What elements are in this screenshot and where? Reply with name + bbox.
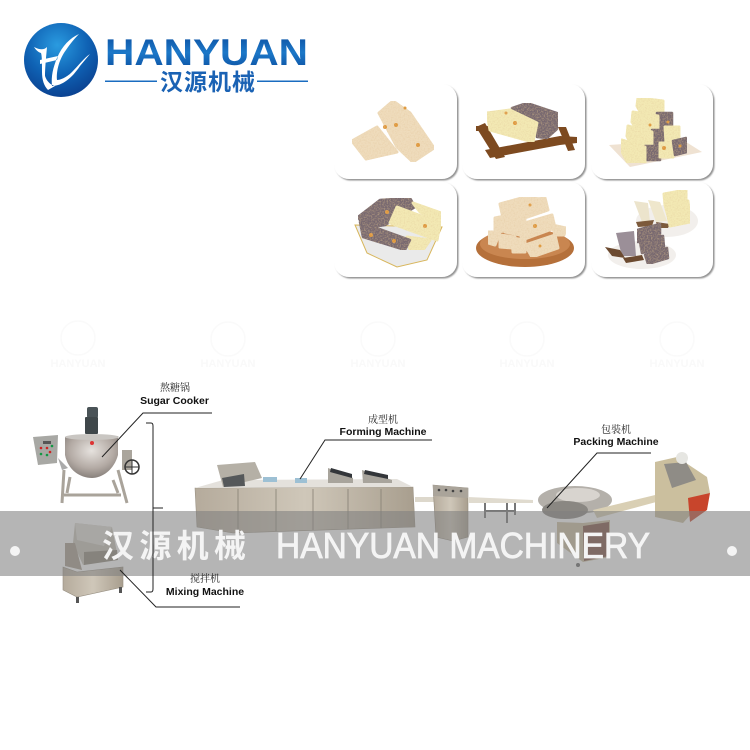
callout: Mixing Machine: 搅拌机	[190, 572, 220, 585]
watermark grid: HANYUAN	[350, 358, 406, 370]
side gearbox and hand wheel	[122, 450, 132, 470]
logo wordmark: HANYUAN	[105, 32, 308, 73]
watermark grid: HANYUAN	[200, 358, 256, 370]
logo: Hanyuan	[24, 23, 308, 97]
panel: product photo 4	[334, 182, 457, 277]
callout: Packing Machine: 包裝机	[601, 423, 631, 436]
panel: product photo 6	[591, 182, 713, 277]
machine: mixing machine	[63, 523, 123, 603]
logo Chinese name: 汉源机械	[160, 69, 255, 95]
depositor head	[217, 462, 262, 487]
machine: forming machine	[195, 462, 415, 533]
watermark grid: HANYUAN	[500, 358, 555, 370]
wrapper head	[655, 457, 710, 523]
callout: Mixing Machine: Mixing Machine	[166, 586, 244, 598]
callout: Sugar Cooker: Sugar Cooker	[140, 395, 209, 407]
banner English title: HANYUAN MACHINERY	[276, 525, 650, 566]
callout: Forming Machine: 成型机	[368, 413, 398, 426]
machine: packing machine	[538, 452, 710, 567]
banner left dot	[10, 546, 20, 556]
press units	[328, 468, 353, 483]
machine: cooling conveyor and control cabinet	[415, 485, 533, 541]
banner right dot	[727, 546, 737, 556]
bracket joining cooker and mixer	[146, 423, 163, 592]
banner Chinese title: 汉源机械	[102, 528, 246, 564]
callout: Forming Machine: Forming Machine	[340, 426, 427, 438]
machine: sugar cooker	[33, 407, 139, 503]
watermark grid	[50, 321, 705, 370]
callout: Forming Machine	[300, 413, 432, 479]
kettle	[65, 436, 118, 478]
panel: product photo 5	[462, 182, 585, 277]
panel: product photo 1	[334, 84, 457, 179]
grey banner	[0, 511, 750, 576]
callout: Mixing Machine	[120, 570, 244, 607]
frame	[62, 470, 127, 503]
motor	[87, 407, 98, 418]
callout: Packing Machine	[547, 423, 659, 508]
callout: Sugar Cooker	[102, 381, 212, 457]
icon: logo globe	[24, 23, 98, 97]
callout: Packing Machine: Packing Machine	[573, 436, 659, 448]
watermark grid: HANYUAN	[50, 358, 106, 370]
control box	[33, 435, 58, 465]
watermark grid: HANYUAN	[650, 358, 705, 370]
callout: Sugar Cooker: 熬糖锅	[160, 381, 190, 394]
panel: product photo 2	[462, 84, 585, 179]
panel: product photo 3	[591, 84, 713, 179]
